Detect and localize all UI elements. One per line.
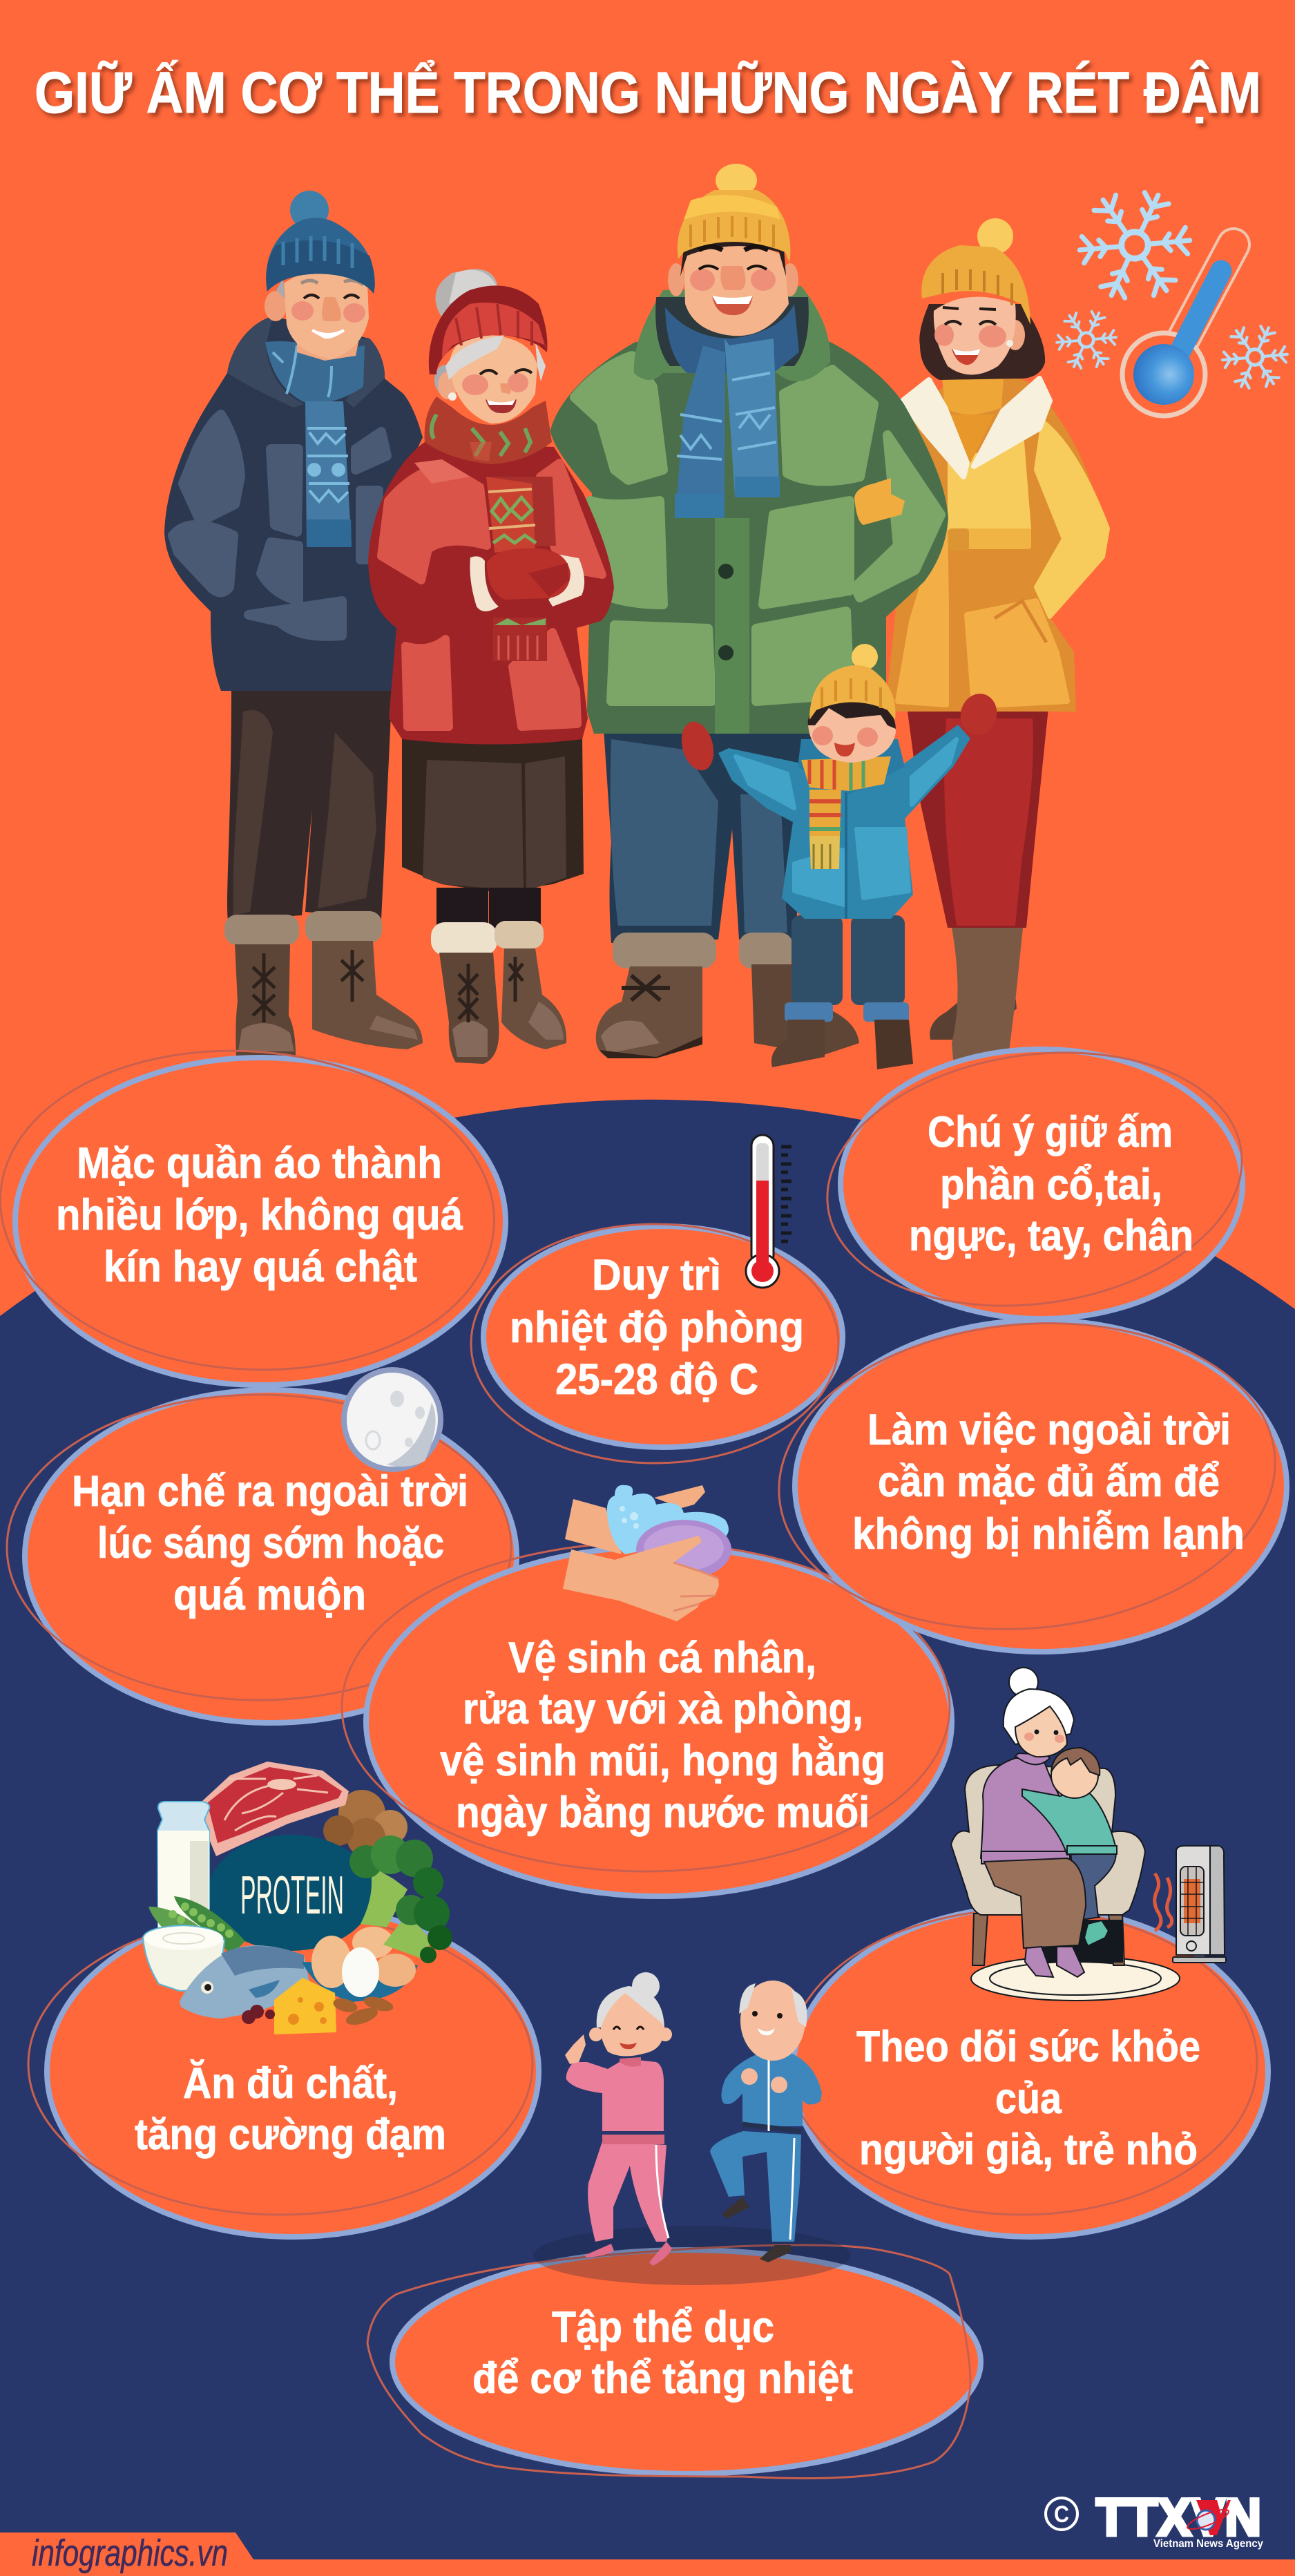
panel: outdoor work — [766, 1303, 1288, 1652]
panel: keep body parts warm — [811, 1027, 1258, 1331]
text: outdoor advice: cần mặc đủ ấm để — [878, 1458, 1220, 1506]
text: outdoor advice — [852, 1406, 1245, 1558]
text: going out advice: quá muộn — [173, 1571, 366, 1619]
food: protein badge — [208, 1835, 374, 1951]
icon: elderly couple exercising — [533, 1972, 851, 2285]
footer site name: infographics.vn — [32, 2532, 228, 2574]
text: hygiene advice: Vệ sinh cá nhân, — [508, 1634, 816, 1682]
text: body parts advice: ngực, tay, chân — [909, 1212, 1193, 1260]
icon: right snowflake — [1222, 325, 1288, 390]
icon: grandmother hugging child by heater — [951, 1668, 1226, 2001]
text: monitor advice — [856, 2023, 1200, 2174]
icon: moon — [344, 1370, 441, 1469]
text: layers advice: Mặc quần áo thành — [77, 1139, 442, 1187]
panel: limit going out — [7, 1390, 517, 1723]
icon: hands washing with soap — [563, 1485, 731, 1621]
text: room temperature advice: 25-28 độ C — [555, 1355, 758, 1404]
logo: TTXVN: TTXVN — [1096, 2488, 1261, 2547]
text: going out advice: Hạn chế ra ngoài trời — [72, 1467, 468, 1516]
text: outdoor advice: Làm việc ngoài trời — [867, 1406, 1231, 1454]
icon: protein foods — [143, 1762, 452, 2034]
panel: monitor health — [787, 1907, 1268, 2237]
copyright mark — [1046, 2498, 1077, 2530]
text: room temperature advice — [510, 1251, 804, 1404]
text: body parts advice: phần cổ,tai, — [940, 1161, 1162, 1209]
ground shadow — [533, 2226, 851, 2285]
text: hygiene advice: ngày bằng nước muối — [456, 1788, 870, 1837]
grandfather exercising — [710, 1981, 822, 2262]
grandmother body — [981, 1753, 1086, 1948]
panel: room temperature — [471, 1224, 843, 1463]
food: cheese — [274, 1978, 336, 2034]
heater — [1173, 1846, 1226, 1963]
food: steak — [202, 1762, 349, 1856]
text: exercise advice: để cơ thể tăng nhiệt — [472, 2354, 853, 2403]
background: navy dome — [0, 1100, 1295, 2576]
text: room temperature advice: Duy trì — [592, 1251, 721, 1299]
child legs — [1071, 1851, 1116, 1946]
logo: TTXVN: Vietnam News Agency — [1153, 2538, 1263, 2550]
heat waves — [1155, 1873, 1172, 1931]
child upper body — [1022, 1789, 1117, 1855]
icon: left snowflake — [1056, 310, 1117, 370]
footer band — [0, 2532, 1295, 2576]
text: layers advice: kín hay quá chật — [104, 1243, 417, 1291]
food: peas — [148, 1896, 245, 1955]
panel: exercise — [367, 2245, 981, 2479]
text: body parts advice: Chú ý giữ ấm — [928, 1108, 1173, 1156]
text: nutrition advice: Ăn đủ chất, — [183, 2059, 398, 2108]
food: nuts — [323, 1790, 407, 1857]
text: exercise advice: Tập thể dục — [552, 2303, 774, 2351]
text: going out advice — [72, 1467, 468, 1619]
grandmother socks — [1025, 1947, 1084, 1977]
text: monitor advice: của — [995, 2074, 1062, 2123]
panel: nutrition — [28, 1905, 539, 2237]
child head — [1051, 1748, 1100, 1798]
copyright mark: C — [1054, 2501, 1069, 2528]
rug — [971, 1956, 1180, 2001]
mother's mitten on father's arm — [854, 478, 905, 525]
text: monitor advice: Theo dõi sức khỏe — [856, 2023, 1200, 2071]
text: going out advice: lúc sáng sớm hoặc — [97, 1519, 444, 1567]
text: hygiene advice: vệ sinh mũi, họng hằng — [440, 1736, 885, 1785]
food: yogurt — [143, 1925, 224, 1991]
text: layers advice: nhiều lớp, không quá — [56, 1191, 463, 1239]
text: outdoor advice: không bị nhiễm lạnh — [852, 1510, 1245, 1558]
grandmother head — [1004, 1668, 1074, 1757]
panel: personal hygiene — [342, 1543, 952, 1896]
text: body parts advice — [909, 1108, 1193, 1260]
food: eggs in bowl — [302, 1927, 418, 2002]
figure: father — [550, 164, 948, 1058]
text: room temperature advice: nhiệt độ phòng — [510, 1304, 804, 1352]
figure: grandfather — [164, 191, 423, 1056]
grandmother exercising — [565, 1972, 672, 2266]
panel: dress in layers — [0, 1035, 506, 1386]
text: monitor advice: người già, trẻ nhỏ — [859, 2126, 1198, 2174]
text: nutrition advice — [135, 2059, 446, 2159]
text: hygiene advice — [440, 1634, 885, 1837]
food: fish — [180, 1945, 311, 2019]
text: exercise advice — [472, 2303, 853, 2403]
text: nutrition advice: tăng cường đạm — [135, 2110, 446, 2159]
figure: child — [676, 644, 1001, 1069]
food: protein badge: PROTEIN — [240, 1864, 344, 1925]
armchair — [951, 1765, 1145, 1965]
icon: red thermometer — [746, 1135, 792, 1288]
food: broccoli — [349, 1835, 452, 1963]
text: hygiene advice: rửa tay với xà phòng, — [463, 1685, 863, 1733]
figure: grandmother — [368, 269, 614, 1064]
icon: large snowflake — [1079, 189, 1191, 301]
illustration: family in winter clothes — [164, 164, 1108, 1069]
food: milk bottle — [157, 1802, 209, 1927]
icon: blue thermometer — [1122, 245, 1234, 416]
food: beans and almonds — [242, 1994, 395, 2028]
figure: mother — [886, 218, 1108, 1060]
text: layers advice — [56, 1139, 463, 1291]
